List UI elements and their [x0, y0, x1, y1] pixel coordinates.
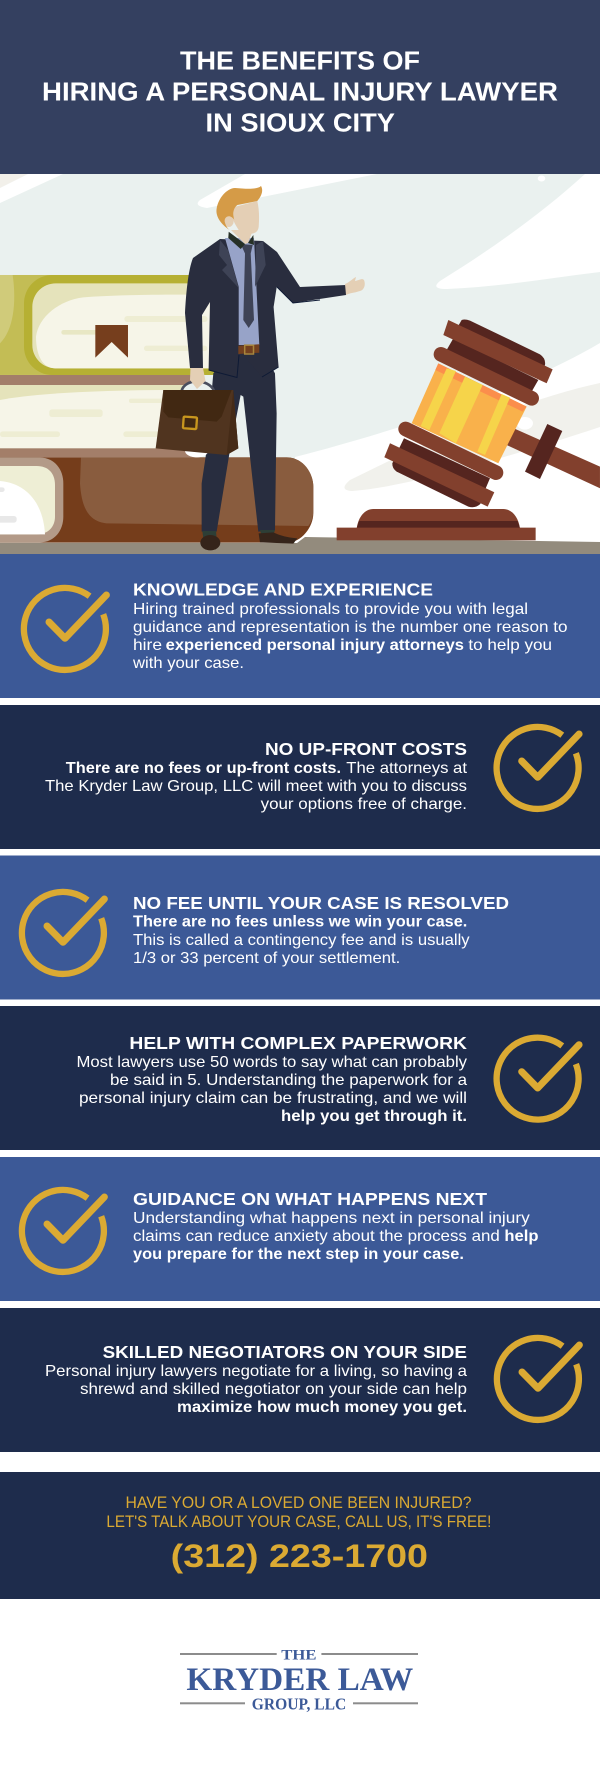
title: THE BENEFITS OF	[180, 48, 420, 76]
body text: hire	[133, 637, 162, 654]
panel: complex paperwork	[0, 1006, 600, 1150]
heading: NO UP-FRONT COSTS	[265, 739, 467, 759]
illustration: lawyer with books and gavel	[0, 174, 600, 554]
collar	[228, 232, 254, 249]
icon: gold check circle	[24, 588, 106, 670]
socks and shoes	[200, 530, 297, 550]
heading: GUIDANCE ON WHAT HAPPENS NEXT	[133, 1189, 487, 1209]
body text: There are no fees or up-front costs.	[66, 760, 341, 777]
panel: no up-front costs	[0, 705, 600, 849]
body text: personal injury claim can be frustrating, and we will	[79, 1090, 467, 1107]
title	[42, 48, 558, 138]
body text: 1/3 or 33 percent of your settlement.	[133, 950, 400, 967]
stack of books	[0, 275, 313, 543]
necktie	[241, 244, 254, 328]
icon: gold check circle	[22, 892, 104, 974]
head and gesturing hand	[216, 186, 365, 295]
body text: with your case.	[132, 655, 244, 672]
icon: gold check circle	[497, 1338, 579, 1420]
body text: help you get through it.	[281, 1108, 467, 1125]
gavel sound block	[337, 509, 536, 540]
lapels	[219, 240, 239, 288]
gavel	[337, 319, 600, 540]
body text: There are no fees unless we win your case.	[133, 914, 467, 931]
body text: help	[504, 1228, 539, 1245]
body text: Understanding what happens next in personal injury	[133, 1210, 530, 1227]
shirt	[225, 238, 259, 345]
body text	[132, 601, 568, 672]
phone number: (312) 223-1700	[171, 1538, 428, 1574]
body text	[133, 1210, 539, 1263]
body text: Personal injury lawyers negotiate for a living, so having a	[45, 1363, 467, 1380]
trousers	[202, 347, 277, 532]
logo: The Kryder Law Group, LLC: KRYDER LAW	[186, 1662, 413, 1698]
icon: bookmark	[95, 325, 128, 358]
body text: your options free of charge.	[261, 796, 467, 813]
heading: KNOWLEDGE AND EXPERIENCE	[133, 580, 433, 600]
icon: gold check circle	[497, 1038, 579, 1120]
call to action text: LET'S TALK ABOUT YOUR CASE, CALL US, IT'S FREE!	[106, 1513, 491, 1531]
body text: Hiring trained professionals to provide you with legal	[133, 601, 528, 618]
body text	[133, 914, 470, 967]
logo: The Kryder Law Group, LLC: GROUP, LLC	[252, 1694, 346, 1713]
call to action text	[106, 1494, 491, 1531]
body text: The attorneys at	[346, 760, 468, 777]
heading: SKILLED NEGOTIATORS ON YOUR SIDE	[103, 1342, 467, 1362]
heading: NO FEE UNTIL YOUR CASE IS RESOLVED	[133, 893, 509, 913]
icon: gold check circle	[22, 1190, 104, 1272]
cream middle book and brown bottom book	[0, 375, 313, 543]
jacket	[185, 239, 346, 377]
neck	[231, 230, 253, 244]
body text: This is called a contingency fee and is usually	[133, 932, 470, 949]
body text	[45, 1363, 467, 1416]
lawyer figure	[156, 186, 365, 550]
title: IN SIOUX CITY	[206, 110, 395, 138]
body text: The Kryder Law Group, LLC will meet with you to discuss	[45, 778, 467, 795]
body text: be said in 5. Understanding the paperwork for a	[110, 1072, 467, 1089]
logo: The Kryder Law Group, LLC	[180, 1647, 418, 1713]
icon: gold check circle	[497, 727, 579, 809]
call to action text: HAVE YOU OR A LOVED ONE BEEN INJURED?	[126, 1494, 472, 1512]
hand holding briefcase	[190, 368, 206, 389]
panel: guidance on what happens next	[0, 1157, 600, 1301]
body text: guidance and representation is the number one reason to	[133, 619, 568, 636]
body text	[76, 1054, 467, 1125]
heading: HELP WITH COMPLEX PAPERWORK	[129, 1033, 467, 1053]
body text: Most lawyers use 50 words to say what can probably	[76, 1054, 467, 1071]
body text: experienced personal injury attorneys	[166, 637, 464, 654]
body text: you prepare for the next step in your case.	[133, 1246, 464, 1263]
body text: shrewd and skilled negotiator on your side can help	[80, 1381, 467, 1398]
body text	[45, 760, 468, 813]
panel: no fee until resolved	[0, 856, 600, 1000]
panel: skilled negotiators	[0, 1308, 600, 1452]
briefcase	[156, 381, 238, 457]
logo: The Kryder Law Group, LLC: THE	[281, 1647, 316, 1663]
panel: knowledge and experience	[0, 554, 600, 698]
header banner	[0, 0, 600, 174]
body text: claims can reduce anxiety about the process and	[133, 1228, 500, 1245]
body text: to help you	[468, 637, 552, 654]
panel: call to action	[0, 1472, 600, 1599]
ground	[0, 537, 600, 554]
title: HIRING A PERSONAL INJURY LAWYER	[42, 79, 558, 107]
olive top book	[0, 275, 239, 375]
body text: maximize how much money you get.	[177, 1399, 467, 1416]
belt	[238, 344, 259, 354]
